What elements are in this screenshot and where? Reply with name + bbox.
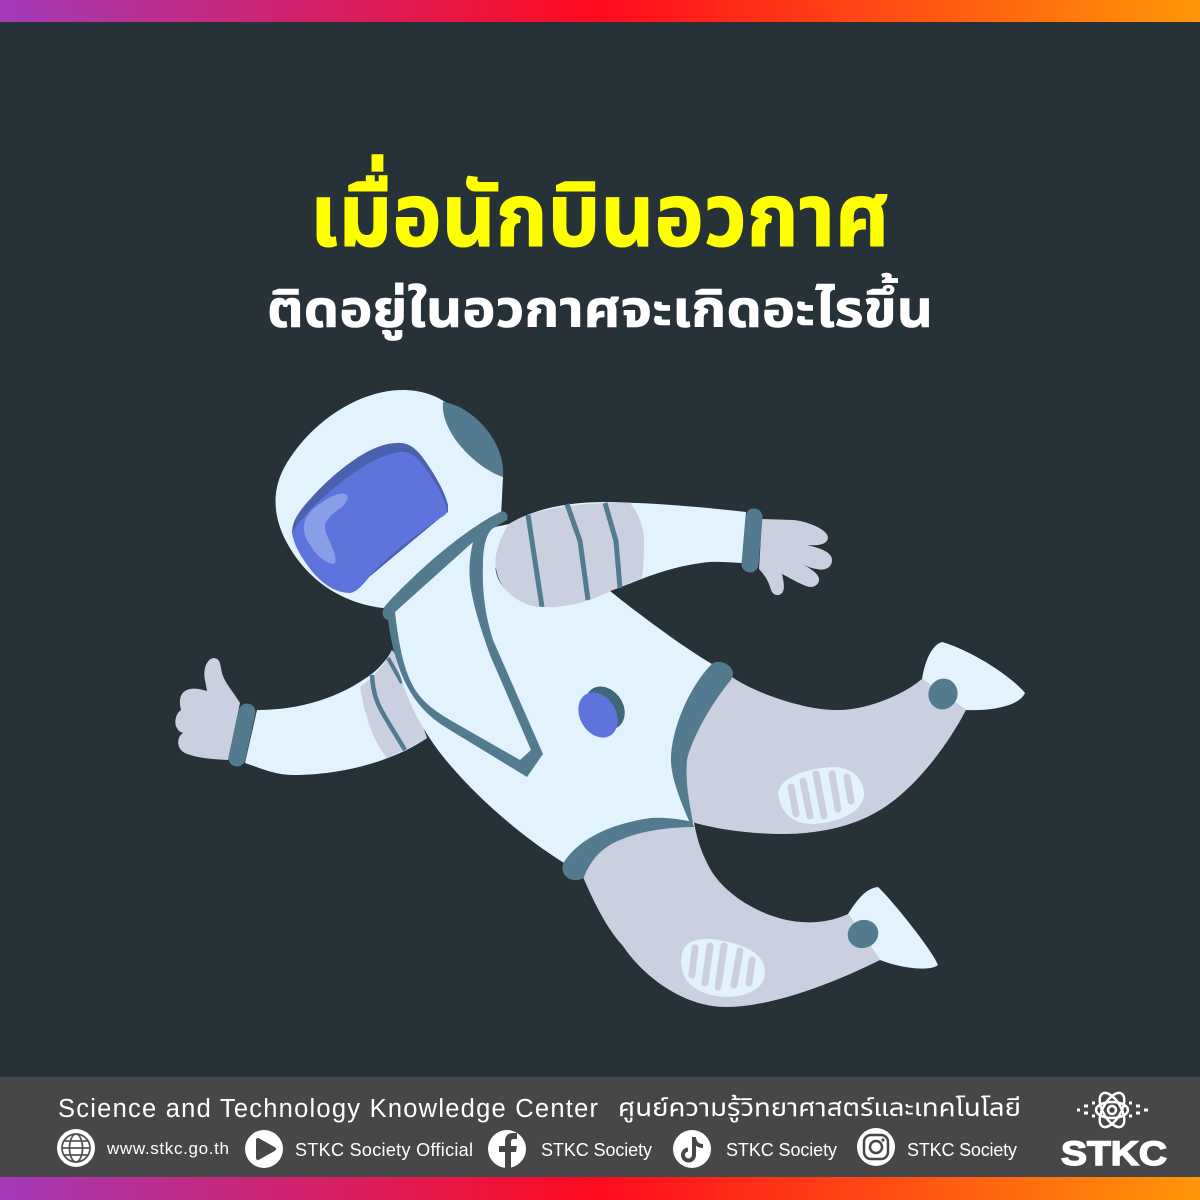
bottom gradient bar bbox=[0, 1177, 1200, 1200]
facebook label: STKC Society bbox=[541, 1140, 652, 1160]
website label: www.stkc.go.th bbox=[106, 1139, 229, 1158]
collar and chest harness bbox=[383, 511, 543, 777]
tiktok label: STKC Society bbox=[726, 1140, 837, 1160]
logo: STKC bbox=[1061, 1089, 1167, 1173]
icon: instagram bbox=[857, 1128, 895, 1166]
icon: play bbox=[245, 1130, 283, 1168]
right glove bbox=[759, 519, 832, 595]
upper leg bbox=[675, 677, 966, 834]
chest emblem bbox=[570, 679, 633, 745]
upper boot bbox=[922, 642, 1025, 710]
logo wordmark: STKC bbox=[1061, 1135, 1167, 1173]
lower ankle joint bbox=[844, 916, 882, 952]
helmet side patch bbox=[443, 402, 503, 477]
icon: tiktok bbox=[673, 1130, 711, 1168]
icon: globe bbox=[57, 1129, 95, 1167]
logo atom mark bbox=[1077, 1089, 1148, 1131]
visor rim bbox=[292, 443, 448, 593]
left cuff bbox=[237, 712, 247, 758]
top gradient bar bbox=[0, 0, 1200, 22]
chest panel bbox=[395, 542, 531, 760]
left glove bbox=[175, 658, 240, 760]
left arm bbox=[245, 650, 427, 775]
upper knee patch bbox=[778, 767, 864, 824]
right cuff bbox=[750, 517, 754, 564]
right arm bbox=[490, 502, 746, 607]
youtube label: STKC Society Official bbox=[295, 1140, 473, 1160]
helmet bbox=[276, 390, 503, 608]
footer heading thai: ศูนย์ความรู้วิทยาศาสตร์และเทคโนโลยี bbox=[618, 1094, 1021, 1123]
upper waist band bbox=[671, 662, 733, 823]
visor highlight bbox=[304, 493, 348, 564]
footer panel bbox=[0, 1077, 1200, 1177]
visor glass bbox=[292, 452, 447, 593]
footer heading english: Science and Technology Knowledge Center bbox=[58, 1095, 598, 1123]
subtitle: ติดอยู่ในอวกาศจะเกิดอะไรขึ้น bbox=[267, 273, 933, 341]
title: เมื่อนักบินอวกาศ bbox=[310, 154, 890, 265]
lower knee patch bbox=[681, 939, 765, 997]
instagram label: STKC Society bbox=[907, 1140, 1017, 1160]
upper ankle joint bbox=[924, 674, 962, 714]
lower leg bbox=[575, 822, 880, 1007]
icon: facebook bbox=[488, 1130, 526, 1168]
astronaut illustration bbox=[175, 390, 1025, 1007]
torso bbox=[388, 524, 712, 863]
lower boot bbox=[848, 887, 938, 969]
lower waist band bbox=[562, 818, 694, 880]
